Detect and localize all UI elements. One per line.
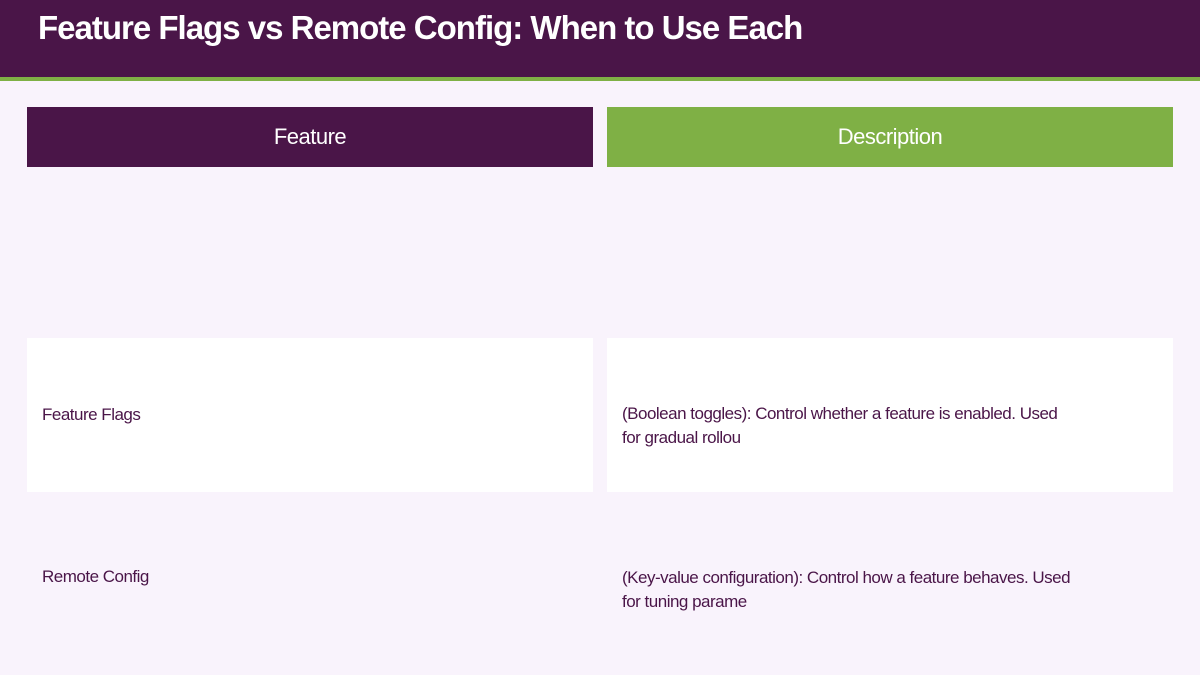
row 1 description cell: (Boolean toggles): Control whether a feature is enabled. Used for gradual rollou <box>622 404 1057 447</box>
column header: Feature: Feature <box>274 124 346 149</box>
column header: Description: Description <box>838 124 942 149</box>
row 2 feature cell: Remote Config <box>42 567 149 586</box>
row 1 description cell <box>607 338 1173 492</box>
row 1 feature cell <box>27 338 593 492</box>
header bar <box>0 0 1200 77</box>
row 2 description cell: (Key-value configuration): Control how a feature behaves. Used for tuning parame <box>622 568 1070 611</box>
column header: Description <box>607 107 1173 167</box>
title: Feature Flags vs Remote Config: When to Use Each <box>38 9 802 46</box>
row 1 feature cell: Feature Flags <box>42 405 140 424</box>
column header: Feature <box>27 107 593 167</box>
